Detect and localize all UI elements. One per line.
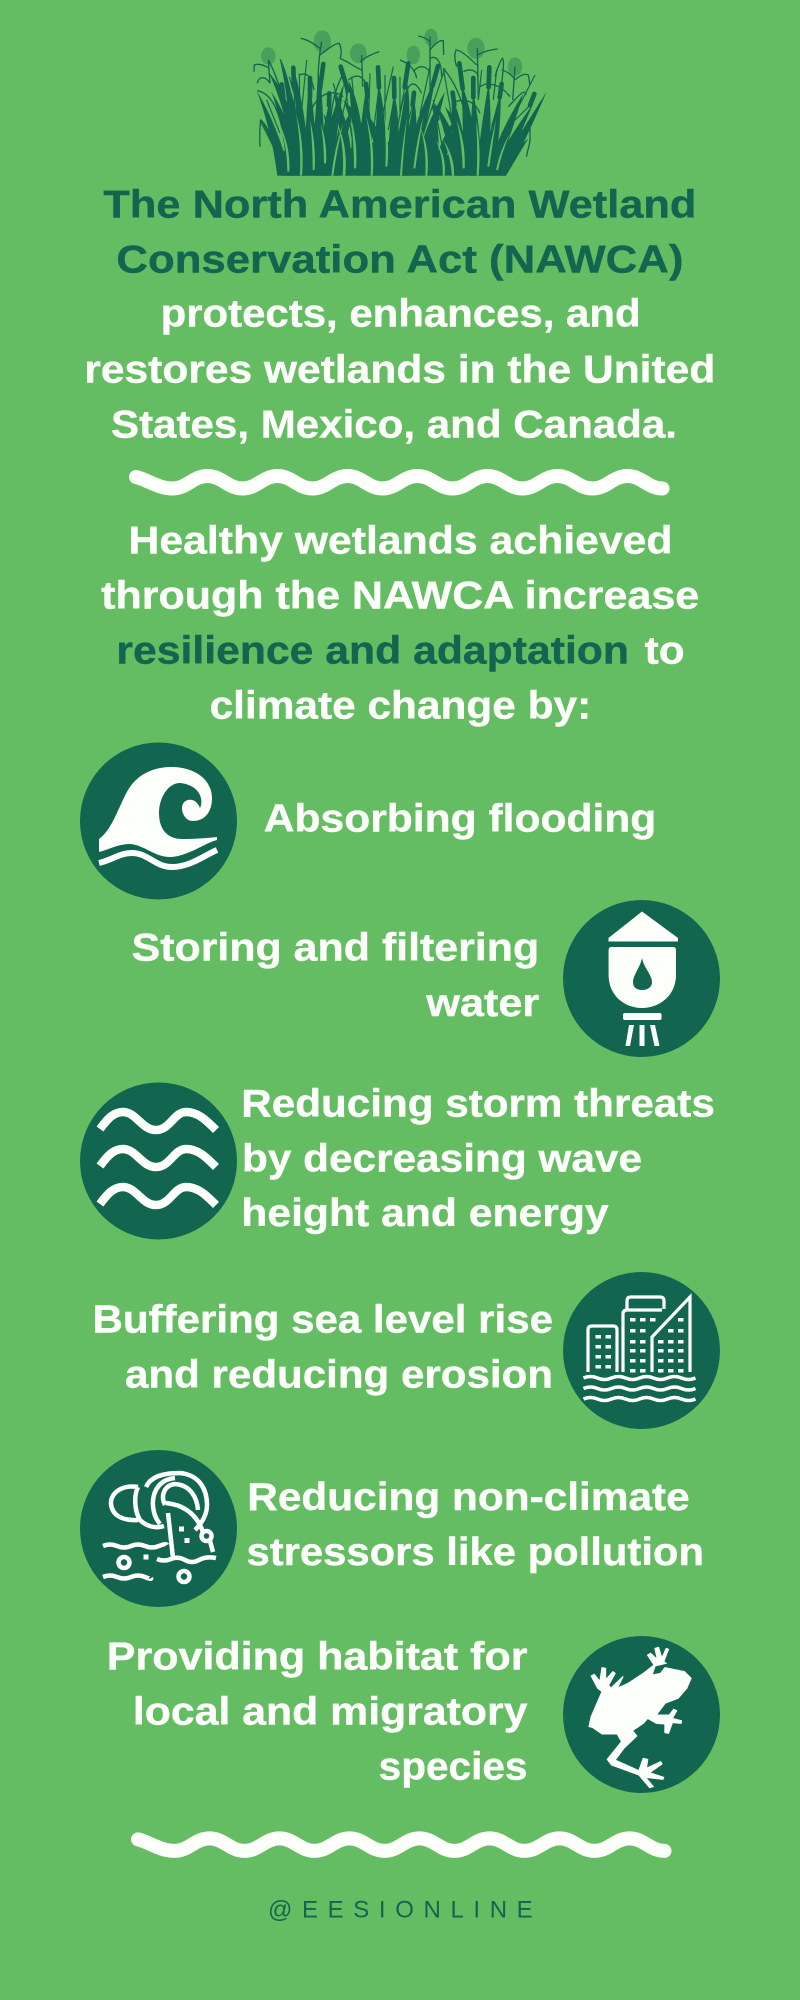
label: [92, 1299, 553, 1397]
label: local and migratory: [133, 1690, 528, 1733]
illustration: wetland grass and cattails: [254, 29, 547, 176]
label: [241, 1083, 715, 1235]
label: height and energy: [241, 1192, 609, 1235]
label: stressors like pollution: [246, 1531, 704, 1574]
solid base of the reeds: [276, 140, 508, 176]
icon: frog: [563, 1636, 720, 1793]
intro text: resilience and adaptation: [101, 519, 699, 727]
label: species: [379, 1745, 528, 1788]
icon: water tank: [563, 900, 720, 1057]
light gaps between blades: [279, 113, 510, 176]
cattail heads: [282, 63, 534, 119]
heading: NAWCA definition: protects, enhances, and: [161, 293, 641, 336]
item: storing and filtering water: [132, 900, 720, 1057]
label: Providing habitat for: [107, 1635, 528, 1678]
wavy divider: bottom: [138, 1838, 664, 1851]
intro text: resilience and adaptation: to: [645, 629, 685, 672]
label: water: [425, 982, 539, 1025]
heading: NAWCA definition: [84, 183, 715, 446]
intro text: resilience and adaptation: through the NAWCA increase: [101, 574, 699, 617]
thin upper blades: [260, 60, 535, 157]
icon: breaking wave: [80, 742, 237, 900]
intro text: resilience and adaptation: Healthy wetlands achieved: [128, 519, 672, 562]
heading: NAWCA definition: Conservation Act (NAWCA): [116, 238, 683, 281]
label: [107, 1635, 528, 1788]
item: providing habitat: [107, 1635, 720, 1793]
heading: NAWCA definition: States, Mexico, and Canada.: [111, 403, 677, 446]
label: [246, 1476, 704, 1574]
label: and reducing erosion: [125, 1354, 553, 1397]
icon: polluting outfall pipe: [80, 1450, 237, 1607]
label: [132, 927, 539, 1025]
label: Absorbing flooding: [264, 798, 656, 841]
seed plumes: [261, 29, 522, 76]
intro text: resilience and adaptation: climate change by:: [210, 684, 591, 727]
label: Buffering sea level rise: [92, 1299, 553, 1342]
grass blades: [257, 60, 547, 176]
footer: social handle: @EESIONLINE: [268, 1896, 533, 1923]
item: reducing storm threats: [80, 1082, 715, 1240]
heading: NAWCA definition: restores wetlands in the United: [84, 348, 715, 391]
heading: NAWCA definition: The North American Wetland: [103, 183, 696, 226]
label: Reducing storm threats: [241, 1083, 715, 1126]
arching stems: [254, 36, 530, 157]
label: by decreasing wave: [242, 1138, 642, 1181]
item: buffering sea level rise: [92, 1272, 720, 1429]
item: reducing non-climate stressors: [80, 1450, 704, 1607]
icon: three waves: [80, 1082, 237, 1240]
label: Reducing non-climate: [247, 1476, 690, 1519]
label: Storing and filtering: [132, 927, 539, 970]
item: absorbing flooding: [80, 742, 656, 900]
intro text: resilience and adaptation: resilience and adaptation: [116, 629, 629, 672]
icon: flooded city: [563, 1272, 720, 1429]
wavy divider: top: [136, 476, 662, 488]
